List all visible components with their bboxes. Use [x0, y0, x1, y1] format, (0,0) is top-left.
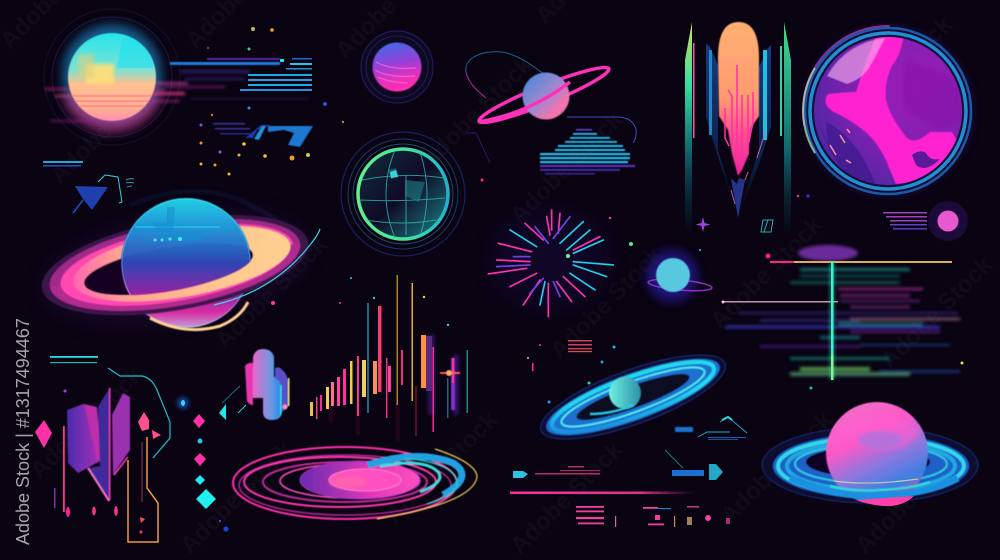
planet: small teal with ring — [646, 250, 712, 302]
starburst — [488, 210, 633, 317]
planet: large magenta — [800, 23, 976, 199]
colored dots: top left — [200, 27, 327, 176]
watermark pattern: Adobe Stock — [850, 436, 973, 559]
planet: saturn top centre — [466, 52, 612, 130]
planet: small pink right — [883, 201, 968, 241]
watermark pattern: Adobe Stock — [505, 436, 628, 559]
watermark pattern: Adobe Stock — [210, 231, 333, 354]
planet: small magenta — [361, 31, 433, 103]
planet: large ringed — [34, 191, 320, 343]
planet: teal ringed — [532, 338, 734, 456]
watermark pattern: Adobe Stock — [175, 436, 298, 559]
bottom arrows and dashes — [510, 450, 723, 494]
icon: blue glitch arrows — [213, 123, 313, 147]
watermark pattern: Adobe Stock — [715, 406, 838, 529]
spiral galaxy — [233, 447, 477, 519]
watermark pattern: Adobe Stock — [705, 211, 828, 334]
watermark pattern: Adobe Stock — [45, 66, 168, 189]
striped dome — [466, 117, 636, 174]
watermark pattern: Adobe Stock — [875, 251, 998, 374]
bottom glyph row — [576, 506, 730, 527]
bar chart — [310, 275, 468, 442]
crystal accents — [35, 390, 161, 517]
stock id text: Adobe Stock | #1317494467 — [13, 318, 33, 545]
icon: small arrow top-left — [43, 161, 134, 213]
planet: pink ringed bottom right — [762, 402, 978, 506]
rocket — [685, 22, 791, 232]
crystal cluster — [67, 387, 130, 502]
watermark pattern: Adobe Stock — [25, 361, 148, 484]
neon bracket outlines — [50, 356, 189, 542]
watermark pattern: Adobe Stock — [545, 241, 668, 364]
planet: green wireframe globe — [341, 132, 465, 256]
front half of ring — [42, 242, 308, 316]
icons: small sparkle and box — [696, 217, 773, 232]
watermark pattern: Adobe Stock — [835, 11, 958, 134]
watermark pattern: Adobe Stock — [380, 406, 503, 529]
capsule shapes — [245, 349, 290, 420]
horizontal lines panel — [722, 245, 960, 380]
planet: glowing sun — [44, 9, 188, 145]
small data glyphs centre-right — [532, 340, 747, 440]
watermark pattern: Adobe Stock — [505, 106, 628, 229]
scattered stars — [271, 121, 964, 404]
speed lines: top left — [165, 58, 312, 100]
small cyan triangle and lines — [219, 386, 246, 420]
diamond column — [193, 414, 228, 532]
watermark pattern: Adobe Stock — [415, 51, 538, 174]
